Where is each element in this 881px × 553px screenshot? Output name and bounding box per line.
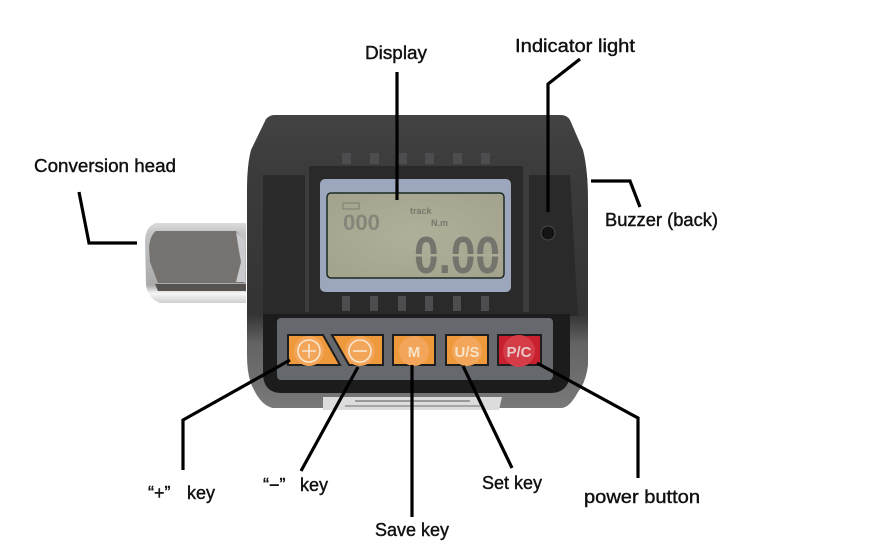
M key [393,335,435,366]
display: track [410,206,433,216]
U/S key: U/S [454,344,480,361]
arrow: power button [537,363,638,478]
buzzer hole / indicator light [541,226,555,240]
arrow: minus key [301,367,358,471]
model label plate [323,397,502,410]
display: 000 [343,210,380,235]
arrow: plus key [183,360,290,470]
label: Conversion head: Conversion head [34,156,176,176]
arrow: save key [410,365,414,517]
label: Indicator light: Indicator light [515,36,635,56]
arrow: display [395,72,399,200]
device body [247,115,588,408]
minus key [332,335,383,366]
label: Display: Display [365,43,427,63]
arrow: indicator light [548,59,580,212]
M key: M [408,344,420,361]
P/C key: P/C [506,344,532,361]
display [320,179,511,292]
P/C key [498,335,541,367]
label: minus key: “−” [263,475,286,495]
display: N.m [431,218,448,228]
label: plus key: “+” [148,483,171,503]
U/S key [446,335,488,366]
label lines [79,59,640,517]
label: power button: power button [584,487,700,507]
arrow: conversion head [79,192,137,243]
display: 0.00 [414,227,500,285]
label: plus key: key [187,483,215,503]
label: Set key: Set key [482,473,542,493]
arrow: buzzer [591,181,640,207]
label: Buzzer (back): Buzzer (back) [605,210,718,230]
vent ticks [342,153,490,311]
conversion head [145,223,246,303]
plus key [288,335,340,366]
keypad [277,318,553,380]
label: minus key: key [300,475,328,495]
label: Save key: Save key [375,520,449,540]
arrow: set key [463,366,512,468]
